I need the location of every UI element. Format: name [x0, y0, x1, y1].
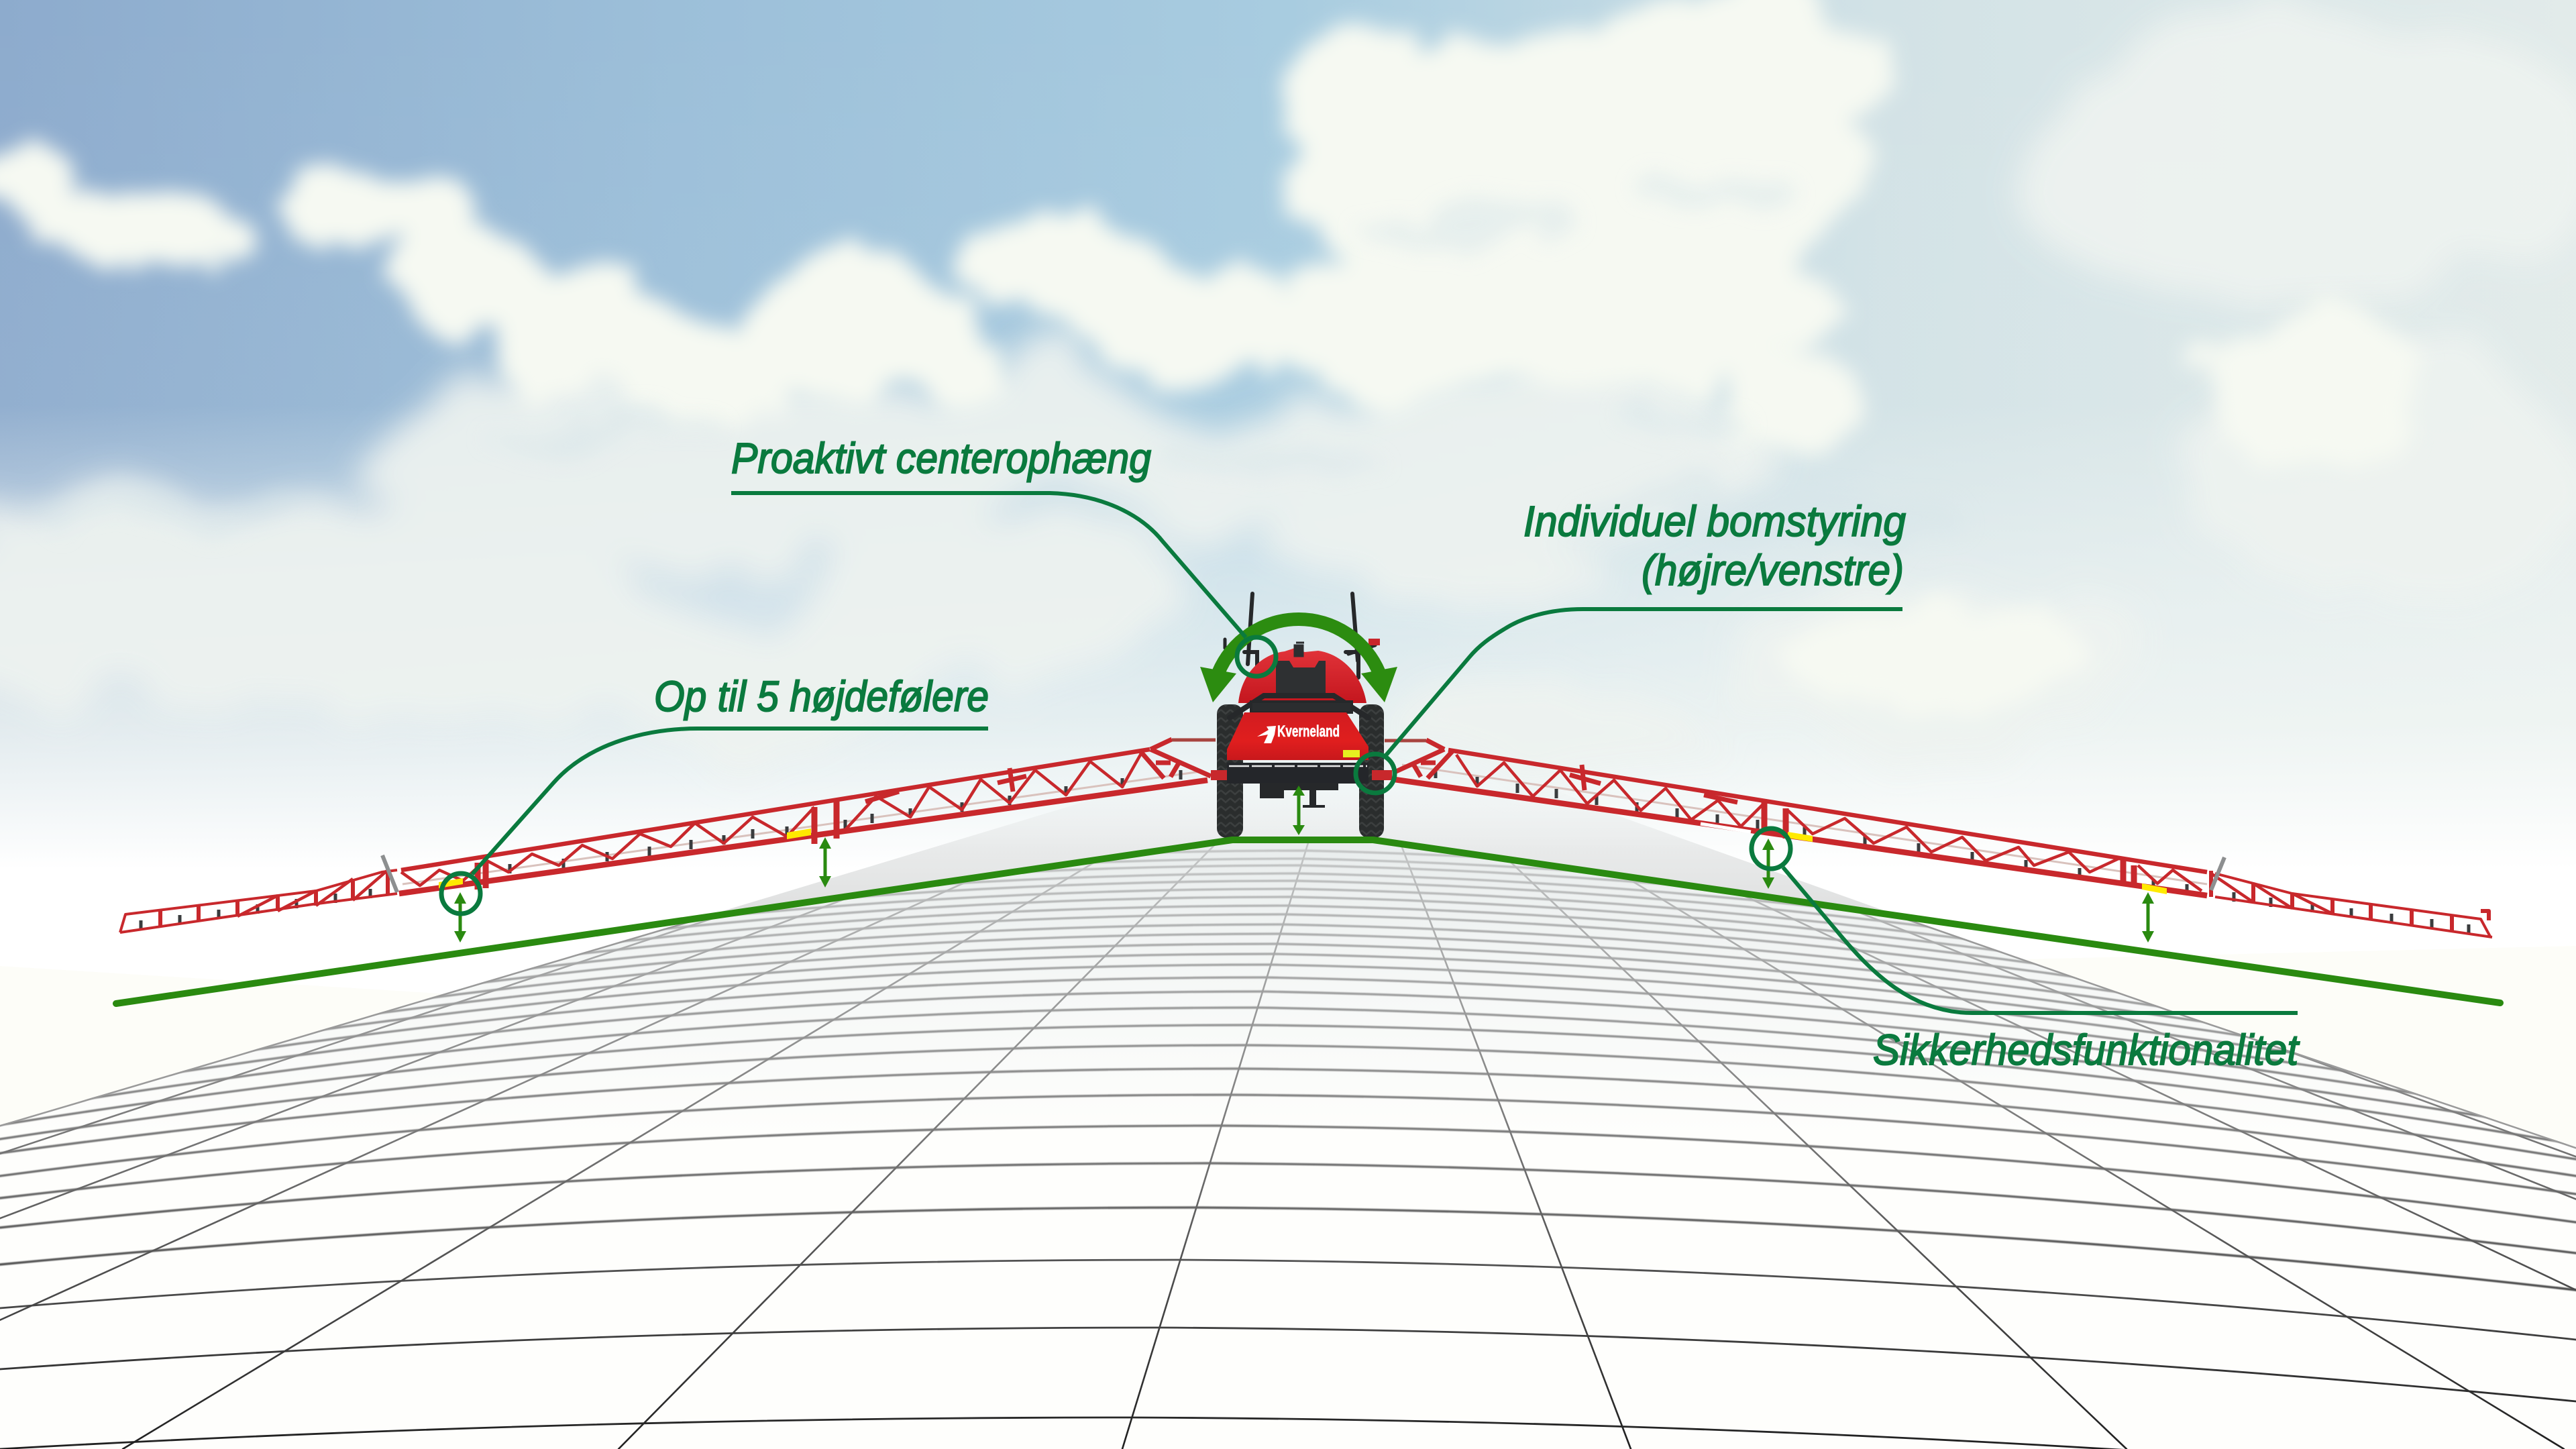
sprayer: wheels — [1217, 704, 1384, 838]
ground surface wedge above the terrain line — [698, 785, 1900, 918]
height arrow: left inner — [819, 837, 831, 888]
sprayer: axle highlight — [1229, 765, 1367, 767]
background: soft cloud mass — [0, 20, 2576, 770]
right boom: hydraulic details — [1570, 765, 1737, 802]
background: defined clouds — [0, 0, 2427, 718]
sprayer: yellow label — [1343, 750, 1360, 757]
background: pale horizon band — [0, 946, 2576, 1154]
right boom: spray pipe and nozzles — [1402, 765, 2469, 934]
left spray boom — [120, 739, 1211, 932]
callout: Op til 5 hoejdefoelere — [441, 672, 989, 914]
sprayer: boom link rods — [1172, 740, 1426, 741]
height arrow: right inner — [1762, 839, 1774, 889]
left boom: hydraulic details — [865, 768, 1026, 802]
logo: brand name: Kverneland — [1277, 722, 1340, 741]
sprayer: red tab — [1368, 639, 1380, 645]
left boom: main truss — [399, 739, 1211, 894]
right boom: pivot blade — [2211, 857, 2224, 890]
sprayer: dark frame arms — [1230, 696, 1368, 718]
sprayer: red rear panel — [1227, 712, 1368, 760]
right boom: white cover strip — [1701, 824, 1751, 832]
terrain contour line — [116, 840, 2500, 1004]
height arrow: right outer — [2142, 892, 2154, 943]
sprayer: rear axle bar — [1227, 763, 1368, 784]
perspective field grid — [0, 839, 2576, 1449]
right spray boom — [1395, 740, 2492, 937]
sprayer: red pivot plates — [1211, 770, 1392, 780]
callout: Individuel bomstyring: Individuel bomstyring — [1523, 497, 1906, 545]
left boom: spray pipe and nozzles — [141, 770, 1201, 930]
callout: Individuel bomstyring: (højre/venstre) — [1642, 546, 1904, 594]
sprayer rear view — [1172, 594, 1426, 838]
sprayer: masts — [1225, 594, 1375, 678]
right boom: yellow sensor bars — [1788, 832, 2167, 894]
sprayer: lower hitch — [1260, 783, 1338, 808]
sprayer: tank — [1238, 648, 1366, 703]
callout: Sikkerhedsfunktionalitet: Sikkerhedsfunktionalitet — [1873, 1026, 2300, 1074]
right boom: main truss — [1395, 740, 2207, 896]
callout: Individuel bomstyring — [1356, 497, 1906, 793]
logo: arrow mark — [1257, 726, 1276, 743]
callout: Sikkerhedsfunktionalitet — [1752, 828, 2300, 1074]
left boom: tip section — [120, 870, 397, 932]
callout: Proaktivt centerophaeng: Proaktivt centerophæng — [731, 434, 1151, 482]
sprayer: black mount plate — [1276, 661, 1326, 693]
rotation arrow over the sprayer — [1200, 619, 1397, 702]
height arrow: centre — [1293, 786, 1305, 835]
left boom: pivot blade — [382, 855, 397, 892]
height arrow: left outer — [454, 892, 466, 943]
left boom: yellow sensor bars — [439, 828, 811, 888]
callout: Op til 5 hoejdefoelere: Op til 5 højdefølere — [654, 672, 989, 720]
callout: Proaktivt centerophaeng — [731, 434, 1276, 676]
background: cloud shading — [0, 172, 1972, 547]
right boom: tip section — [2211, 871, 2492, 937]
ground surface — [0, 840, 2576, 1449]
sprayer: tank cap — [1295, 643, 1304, 656]
